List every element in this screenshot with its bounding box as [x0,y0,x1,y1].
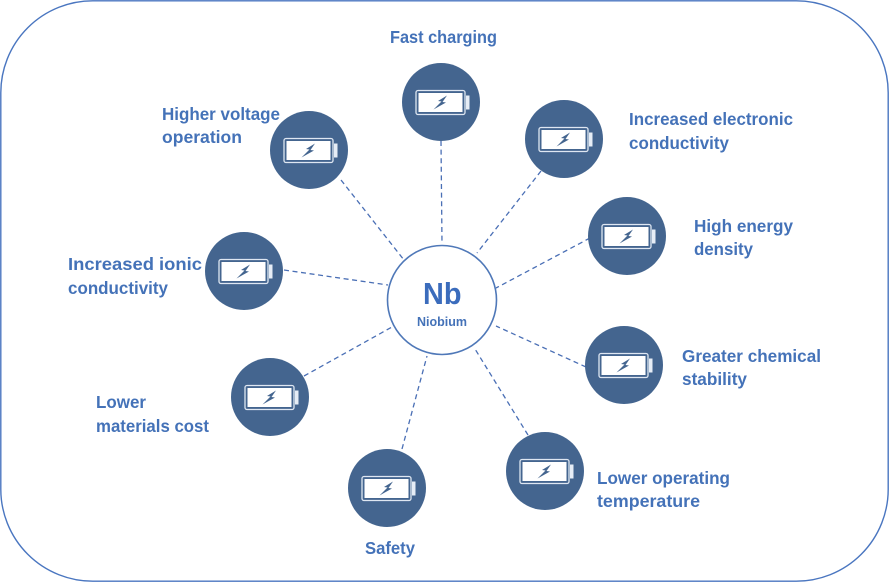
label: Increased ionic conductivity: Increased ionic [68,254,202,274]
icon: battery, materials cost [231,358,309,436]
label: Greater chemical stability [682,346,821,389]
connector lines [284,141,590,449]
symbol Nb: Nb [423,276,462,311]
label: Increased ionic conductivity: conductivity [68,278,168,298]
label: Greater chemical stability: Greater chemical [682,346,821,366]
label: Lower materials cost: Lower [96,392,146,412]
icon: battery, chemical stability [585,326,663,404]
label: Increased ionic conductivity [68,254,202,298]
label: Lower operating temperature: Lower operating [597,468,730,488]
label: Lower operating temperature: temperature [597,491,700,511]
label: Lower materials cost [96,392,209,436]
label: Fast charging: Fast charging [390,27,497,47]
label: Increased electronic conductivity [629,109,793,153]
icon: battery, high energy density [588,197,666,275]
label: High energy density: High energy [694,216,793,236]
label: Increased electronic conductivity: conductivity [629,133,729,153]
icon: battery, electronic conductivity [525,100,603,178]
label: Increased electronic conductivity: Increased electronic [629,109,793,129]
label: High energy density [694,216,793,259]
name Niobium: Niobium [417,314,467,329]
label: Higher voltage operation: operation [162,127,242,147]
icon: battery, operating temperature [506,432,584,510]
icon: battery, ionic conductivity [205,232,283,310]
label: Higher voltage operation [162,104,280,147]
icon: battery, higher voltage [270,111,348,189]
label: Safety: Safety [365,538,415,558]
label: Higher voltage operation: Higher voltage [162,104,280,124]
label: Greater chemical stability: stability [682,369,747,389]
label: Lower materials cost: materials cost [96,416,209,436]
label: Lower operating temperature [597,468,730,511]
label: High energy density: density [694,239,753,259]
icon: battery, fast charging [402,63,480,141]
central circle: Niobium [388,246,496,354]
icon: battery, safety [348,449,426,527]
